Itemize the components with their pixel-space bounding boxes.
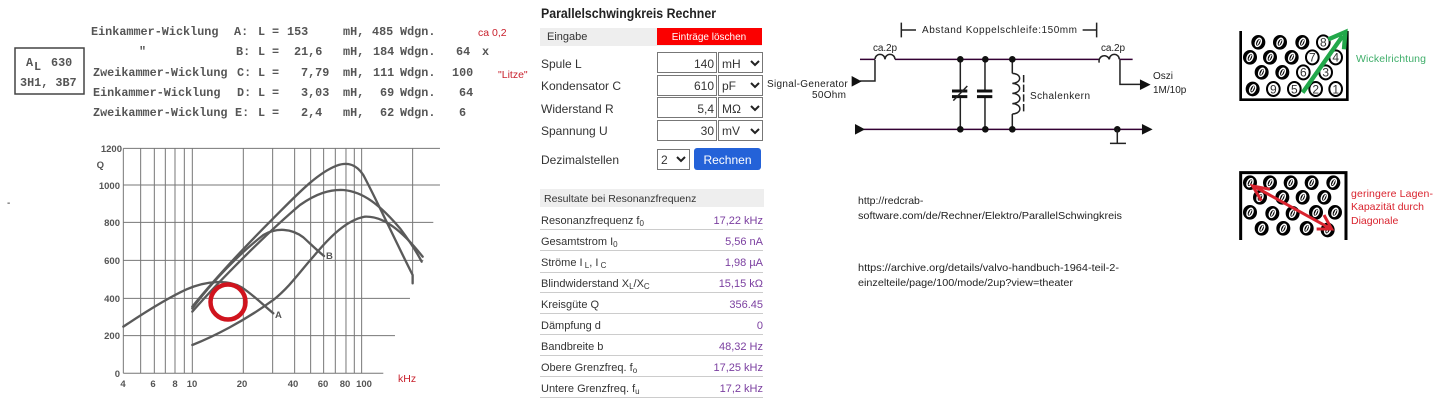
core label box <box>15 48 84 94</box>
label: geringere Lagen-Kapazität: geringere Lagen- <box>1351 188 1434 200</box>
core label box: 3H1, 3B7 <box>20 76 77 90</box>
winding cross-section: 3 <box>1322 66 1329 80</box>
curves A to E <box>123 164 423 345</box>
core label box: L <box>34 60 41 74</box>
winding rows: D: <box>237 86 251 100</box>
results table: Resultate bei Resonanzfrequenz <box>544 193 696 205</box>
results table: 356.45 <box>729 299 763 311</box>
input: Kondensator C <box>541 76 762 96</box>
link: archive.org: https://archive.org/details/valvo-handbuch-1964-teil-2- <box>858 262 1120 274</box>
results table: Obere Grenzfreq. f <box>541 362 633 374</box>
winding rows: L <box>258 25 265 39</box>
y axis labels: 0 <box>115 369 120 380</box>
diagonal cross-section <box>1241 173 1346 240</box>
circuit wiring and components <box>852 23 1153 143</box>
winding rows: L <box>258 106 265 120</box>
button: Rechnen: Rechnen <box>703 153 752 167</box>
input: Dezimalstellen: Dezimalstellen <box>541 153 619 167</box>
y axis labels: 600 <box>104 256 120 267</box>
calculator title: Parallelschwingkreis Rechner <box>541 6 717 21</box>
chart: Q over frequency <box>97 144 440 390</box>
winding cross-section: 8 <box>1320 36 1327 50</box>
input header bar <box>540 28 762 46</box>
highlight circle <box>210 284 246 320</box>
winding rows: 111 <box>373 66 394 80</box>
y axis labels: 1200 <box>101 144 122 155</box>
winding rows: Wdgn. <box>400 45 435 59</box>
results table: 1,98 µA <box>725 257 764 269</box>
x axis labels: 100 <box>356 379 372 390</box>
results table: 15,15 kΩ <box>719 278 763 290</box>
diagram: diagonal winding <box>1241 173 1434 240</box>
results table: L <box>629 282 634 291</box>
curve label B: B <box>326 251 333 262</box>
input: Widerstand R: Widerstand R <box>541 102 614 116</box>
input: Kondensator C: pF <box>722 79 736 93</box>
winding rows: L <box>258 86 265 100</box>
winding rows: Zweikammer-Wicklung <box>93 106 228 120</box>
y axis labels: 400 <box>104 294 120 305</box>
input header bar: Einträge löschen <box>672 32 746 43</box>
winding rows: mH, <box>343 45 364 59</box>
x axis labels <box>120 379 372 390</box>
note: Litze: "Litze" <box>498 69 528 81</box>
winding rows: 69 <box>380 86 394 100</box>
results table: Resonanzfrequenz f <box>541 215 639 227</box>
results table: C <box>598 261 607 270</box>
x axis labels: 10 <box>187 379 197 390</box>
y axis labels: 1000 <box>99 181 120 192</box>
results table: 48,32 Hz <box>719 341 763 353</box>
link: archive.org: einzelteile/page/100/mode/2up?view=theater <box>858 277 1074 289</box>
input header bar: Eingabe <box>547 31 587 43</box>
results table: Bandbreite b <box>541 341 603 353</box>
input: Spannung U: 30 <box>701 124 714 138</box>
input: Kondensator C: 610 <box>694 79 714 93</box>
results table: 0 <box>757 320 763 332</box>
input: Spule L: mH <box>722 57 741 71</box>
panel: calculator form <box>540 6 764 398</box>
winding cross-section: 2 <box>1312 82 1319 96</box>
winding rows: A: <box>234 25 248 39</box>
core label box: 630 <box>51 56 72 70</box>
winding rows: 153 <box>287 25 308 39</box>
results table: Blindwiderstand X <box>541 278 629 290</box>
winding rows: Einkammer-Wicklung <box>91 25 218 39</box>
y axis labels <box>97 144 122 380</box>
input: Spannung U: Spannung U <box>541 124 608 138</box>
winding rows <box>91 25 489 120</box>
stray mark: - <box>7 198 10 209</box>
results table: 0 <box>639 219 644 228</box>
results table: Gesamtstrom I <box>541 236 613 248</box>
results table: 0 <box>613 240 618 249</box>
winding rows: E: <box>235 106 249 120</box>
winding cross-section: 7 <box>1309 51 1316 65</box>
winding rows: B: <box>236 45 250 59</box>
winding rows: L <box>258 66 265 80</box>
results table: 17,22 kHz <box>713 215 763 227</box>
x axis labels: 80 <box>340 379 350 390</box>
button: Rechnen <box>694 148 761 170</box>
link: redcrab: software.com/de/Rechner/Elektro/ParallelSchwingkreis <box>858 210 1122 222</box>
winding rows: C: <box>237 66 251 80</box>
label: 1M/10p: 1M/10p <box>1153 85 1187 96</box>
results table: /X <box>634 278 645 290</box>
winding cross-section: 1 <box>1332 82 1339 96</box>
winding rows: = <box>272 45 279 59</box>
input: Spule L <box>541 52 762 72</box>
input: Spule L: Spule L <box>541 57 582 71</box>
winding rows: 64 <box>456 45 470 59</box>
winding rows: x <box>482 45 489 59</box>
results table: o <box>633 366 638 375</box>
results table: 17,2 kHz <box>720 383 763 395</box>
x axis labels: 4 <box>120 379 126 390</box>
winding rows: 62 <box>380 106 394 120</box>
winding rows: 485 <box>372 25 393 39</box>
results table: 5,56 nA <box>725 236 764 248</box>
x axis labels: 40 <box>288 379 298 390</box>
input: Spannung U: mV <box>722 124 740 138</box>
input: Kondensator C: Kondensator C <box>541 79 621 93</box>
input: Widerstand R: 5,4 <box>697 102 714 116</box>
winding rows: mH, <box>343 86 364 100</box>
results table: 17,25 kHz <box>713 362 763 374</box>
core label box: A <box>26 56 34 70</box>
results table: , I <box>589 257 598 269</box>
winding rows: = <box>272 86 279 100</box>
label: geringere Lagen-Kapazität: Kapazität durch <box>1351 201 1424 213</box>
y axis labels: Q <box>97 160 104 171</box>
y axis labels: 200 <box>104 331 120 342</box>
unit label kHz: kHz <box>398 373 416 385</box>
y axis labels: 800 <box>104 218 120 229</box>
winding rows: Wdgn. <box>400 25 435 39</box>
input: Spule L: 140 <box>694 57 714 71</box>
label: ca.2p right: ca.2p <box>1101 43 1125 54</box>
winding rows: 21,6 <box>294 45 322 59</box>
label: Abstand Koppelschleife: Abstand Koppelschleife:150mm <box>922 25 1077 36</box>
input: Dezimalstellen: 2 <box>661 153 668 167</box>
label: Oszi: Oszi <box>1153 71 1173 82</box>
label: 50 Ohm: 50Ohm <box>812 90 846 101</box>
link: redcrab: http://redcrab- <box>858 195 924 207</box>
winding rows: 64 <box>459 86 473 100</box>
winding rows: 2,4 <box>301 106 322 120</box>
panel: core data table <box>15 25 528 120</box>
winding rows: " <box>139 45 146 59</box>
winding rows: 7,79 <box>301 66 329 80</box>
label: Wickelrichtung: Wickelrichtung <box>1356 53 1426 65</box>
input: Dezimalstellen <box>541 150 690 170</box>
winding cross-section: 6 <box>1300 66 1307 80</box>
winding rows: = <box>272 66 279 80</box>
input: Spannung U <box>541 120 762 140</box>
note: ca 0,2: ca 0,2 <box>478 27 507 39</box>
diagram: winding direction <box>1241 31 1426 100</box>
winding cross-section <box>1241 31 1347 100</box>
winding rows: mH, <box>343 25 364 39</box>
winding rows: 100 <box>452 66 473 80</box>
winding rows: = <box>272 25 279 39</box>
input: Widerstand R: MΩ <box>722 102 741 116</box>
results table: Kreisgüte Q <box>541 299 600 311</box>
winding cross-section: 9 <box>1270 82 1277 96</box>
winding rows: Wdgn. <box>400 66 435 80</box>
winding rows: = <box>272 106 279 120</box>
label: geringere Lagen-Kapazität: Diagonale <box>1351 215 1398 227</box>
chart grid <box>123 148 440 373</box>
winding rows: Wdgn. <box>400 106 435 120</box>
winding rows: mH, <box>343 66 364 80</box>
results table <box>540 189 764 398</box>
results table: Dämpfung d <box>541 320 601 332</box>
winding cross-section: 5 <box>1291 82 1298 96</box>
x axis labels: 20 <box>237 379 247 390</box>
results table: C <box>644 282 650 291</box>
results table: u <box>635 387 640 396</box>
x axis labels: 60 <box>318 379 328 390</box>
winding rows: Einkammer-Wicklung <box>93 86 220 100</box>
winding rows: mH, <box>343 106 364 120</box>
winding rows: Wdgn. <box>400 86 435 100</box>
input: Widerstand R <box>541 98 762 118</box>
winding rows: L <box>258 45 265 59</box>
x axis labels: 6 <box>150 379 156 390</box>
x axis labels: 8 <box>172 379 178 390</box>
circuit diagram <box>767 23 1187 143</box>
curve label A: A <box>275 310 282 321</box>
winding rows: Zweikammer-Wicklung <box>93 66 228 80</box>
results table: L <box>583 261 590 270</box>
label: Signal-Generator: Signal-Generator <box>767 79 848 90</box>
results table: Untere Grenzfreq. f <box>541 383 635 395</box>
results table: Ströme I <box>541 257 583 269</box>
winding rows: 6 <box>459 106 466 120</box>
winding rows: 184 <box>373 45 394 59</box>
label: ca.2p left: ca.2p <box>873 43 897 54</box>
winding rows: 3,03 <box>301 86 329 100</box>
label: Schalenkern: Schalenkern <box>1030 91 1090 102</box>
winding cross-section: 4 <box>1332 51 1339 65</box>
